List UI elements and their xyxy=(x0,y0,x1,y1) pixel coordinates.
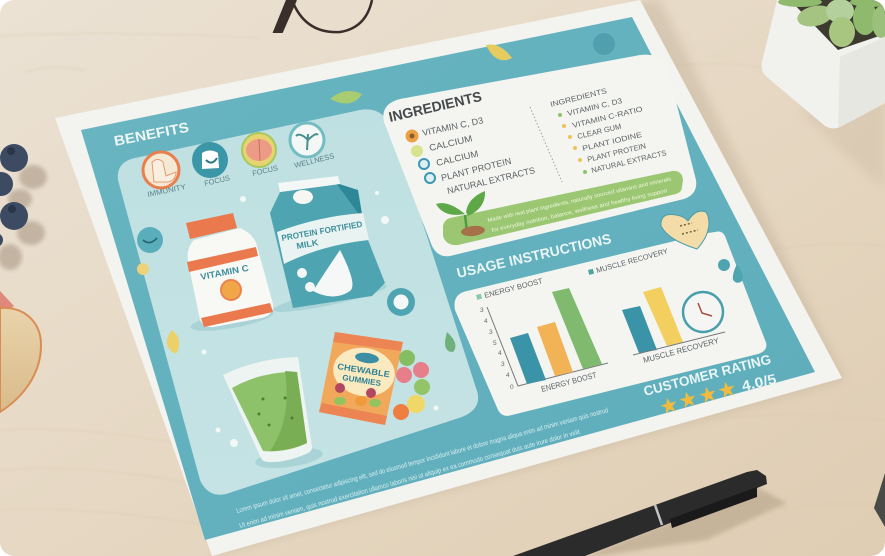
customer rating: 4.0/5 xyxy=(740,370,778,394)
pen xyxy=(513,470,787,556)
usage heading: USAGE INSTRUCTIONS xyxy=(455,230,613,281)
vitamin C bottle: VITAMIN C xyxy=(199,263,250,282)
ingredient list right: NATURAL EXTRACTS xyxy=(590,148,667,175)
small badge bubbles xyxy=(137,191,438,447)
gummies bag: GUMMIES xyxy=(342,373,382,388)
y axis: 4 xyxy=(506,372,510,379)
green callout: Made with real plant ingredients, naturally sourced vitamins and minerals xyxy=(487,176,672,224)
gummies bag: CHEWABLE xyxy=(337,361,391,379)
left bars xyxy=(510,333,546,384)
water drops xyxy=(718,259,743,283)
benefits panel xyxy=(113,109,478,495)
ingredients panel xyxy=(383,55,696,256)
icon: focus: FOCUS xyxy=(203,173,231,188)
milk carton: PROTEIN FORTIFIED xyxy=(281,219,363,243)
footer text: Ut enim ad minim veniam, quis nostrud exercitation ullamco laboris nisi ut aliquip ex ea commodo consequat duis aute irure dolor in velit xyxy=(239,429,581,530)
paper shadow xyxy=(212,0,845,556)
leaves xyxy=(167,33,615,354)
icon: wellness: WELLNESS xyxy=(293,151,335,170)
muscle label: MUSCLE RECOVERY xyxy=(642,336,720,365)
milk carton xyxy=(270,176,388,317)
heart badge xyxy=(661,211,709,249)
icon: wellness xyxy=(290,123,335,170)
ingredient list left: CALCIUM xyxy=(435,149,479,168)
icon: focus xyxy=(192,142,231,188)
icon: brain focus: FOCUS xyxy=(251,163,279,178)
potted plant xyxy=(762,0,885,190)
chart legend: MUSCLE RECOVERY xyxy=(595,246,669,275)
icon: sprout xyxy=(436,191,485,237)
vitamin C bottle xyxy=(186,213,275,335)
ingredient list left: PLANT PROTEIN xyxy=(440,156,512,183)
usage chart panel xyxy=(454,232,766,416)
second pen tip xyxy=(874,473,885,527)
blueberries xyxy=(0,144,47,270)
icon: immunity xyxy=(143,152,187,199)
ingredient list right: VITAMIN C-RATIO xyxy=(571,104,644,130)
green smoothie glass xyxy=(223,357,324,472)
customer rating: CUSTOMER RATING xyxy=(642,352,773,399)
gummies bag xyxy=(319,332,430,425)
ingredient list right xyxy=(549,86,667,175)
ingredients heading: INGREDIENTS xyxy=(387,88,483,125)
ingredient list left: CALCIUM xyxy=(428,133,473,153)
y axis: 4 xyxy=(484,318,488,325)
ingredient list right: VITAMIN C, D3 xyxy=(566,96,623,118)
y axis: 5 xyxy=(493,340,497,347)
benefits heading: BENEFITS xyxy=(113,119,190,149)
glasses xyxy=(274,0,372,32)
ingredient list right: INGREDIENTS xyxy=(549,86,608,109)
ingredient list left: VITAMIN C, D3 xyxy=(421,115,484,138)
chart legend xyxy=(476,246,669,300)
ingredient list left xyxy=(406,115,536,196)
y axis: 3 xyxy=(480,307,484,314)
green callout: for everyday nutrition, balance, wellness and healthy living support xyxy=(491,188,668,234)
y axis: 0 xyxy=(510,384,514,391)
divider xyxy=(530,107,562,182)
y axis: 3 xyxy=(501,361,505,368)
apple slice xyxy=(0,291,41,412)
ingredient list left: NATURAL EXTRACTS xyxy=(446,165,536,196)
ingredient list right: PLANT IODINE xyxy=(581,130,643,153)
y axis: 4 xyxy=(498,350,502,357)
footer text: Lorem ipsum dolor sit amet, consectetur adipiscing elit, sed do eiusmod tempor incididunt labore et dolore magna aliqua enim ad minim veniam quis nostrud xyxy=(236,407,609,515)
chart legend: ENERGY BOOST xyxy=(483,276,544,300)
ingredient list right: CLEAR GUM xyxy=(576,122,622,141)
green callout xyxy=(443,171,683,245)
clock icon xyxy=(683,292,723,332)
energy label: ENERGY BOOST xyxy=(540,370,598,394)
y axis: 3 xyxy=(489,329,493,336)
milk carton: MILK xyxy=(296,237,320,251)
y axis xyxy=(480,307,514,391)
icon: immunity: IMMUNITY xyxy=(147,182,187,199)
icon: brain focus xyxy=(242,133,279,178)
teal background xyxy=(81,17,815,540)
ingredient list right: PLANT PROTEIN xyxy=(586,141,647,164)
right bars xyxy=(622,306,657,353)
